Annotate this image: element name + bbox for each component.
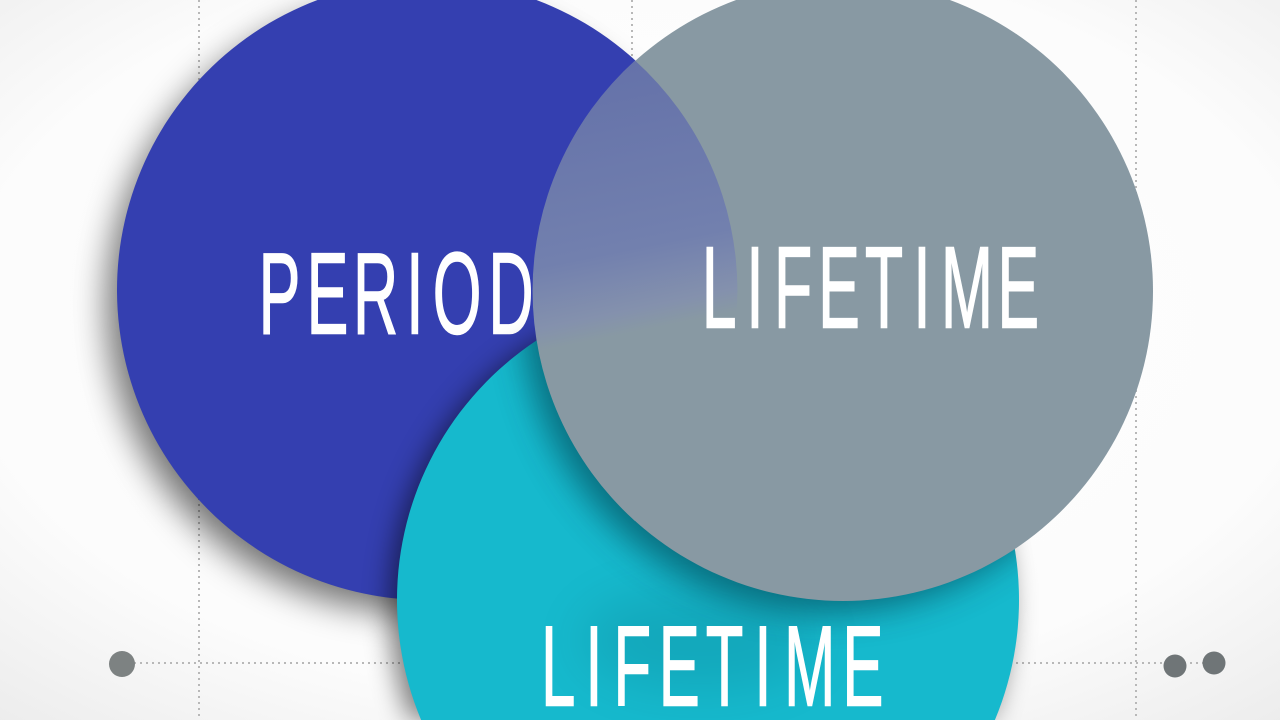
circle: lifetime right: [533, 0, 1153, 601]
overlap region: [533, 60, 737, 521]
label: lifetime right: LIFETIME: [702, 223, 1039, 352]
timeline dot: right lower: [1164, 654, 1186, 678]
teal shading from grey circle: [506, 340, 1018, 691]
label: period: PERIOD: [259, 229, 534, 358]
circle shadow: blue: [107, 0, 719, 612]
circle shadow: teal: [389, 295, 1011, 720]
timeline dot: right upper: [1202, 652, 1226, 674]
timeline dot: left: [109, 651, 135, 677]
circle: lifetime bottom: [397, 340, 1019, 720]
